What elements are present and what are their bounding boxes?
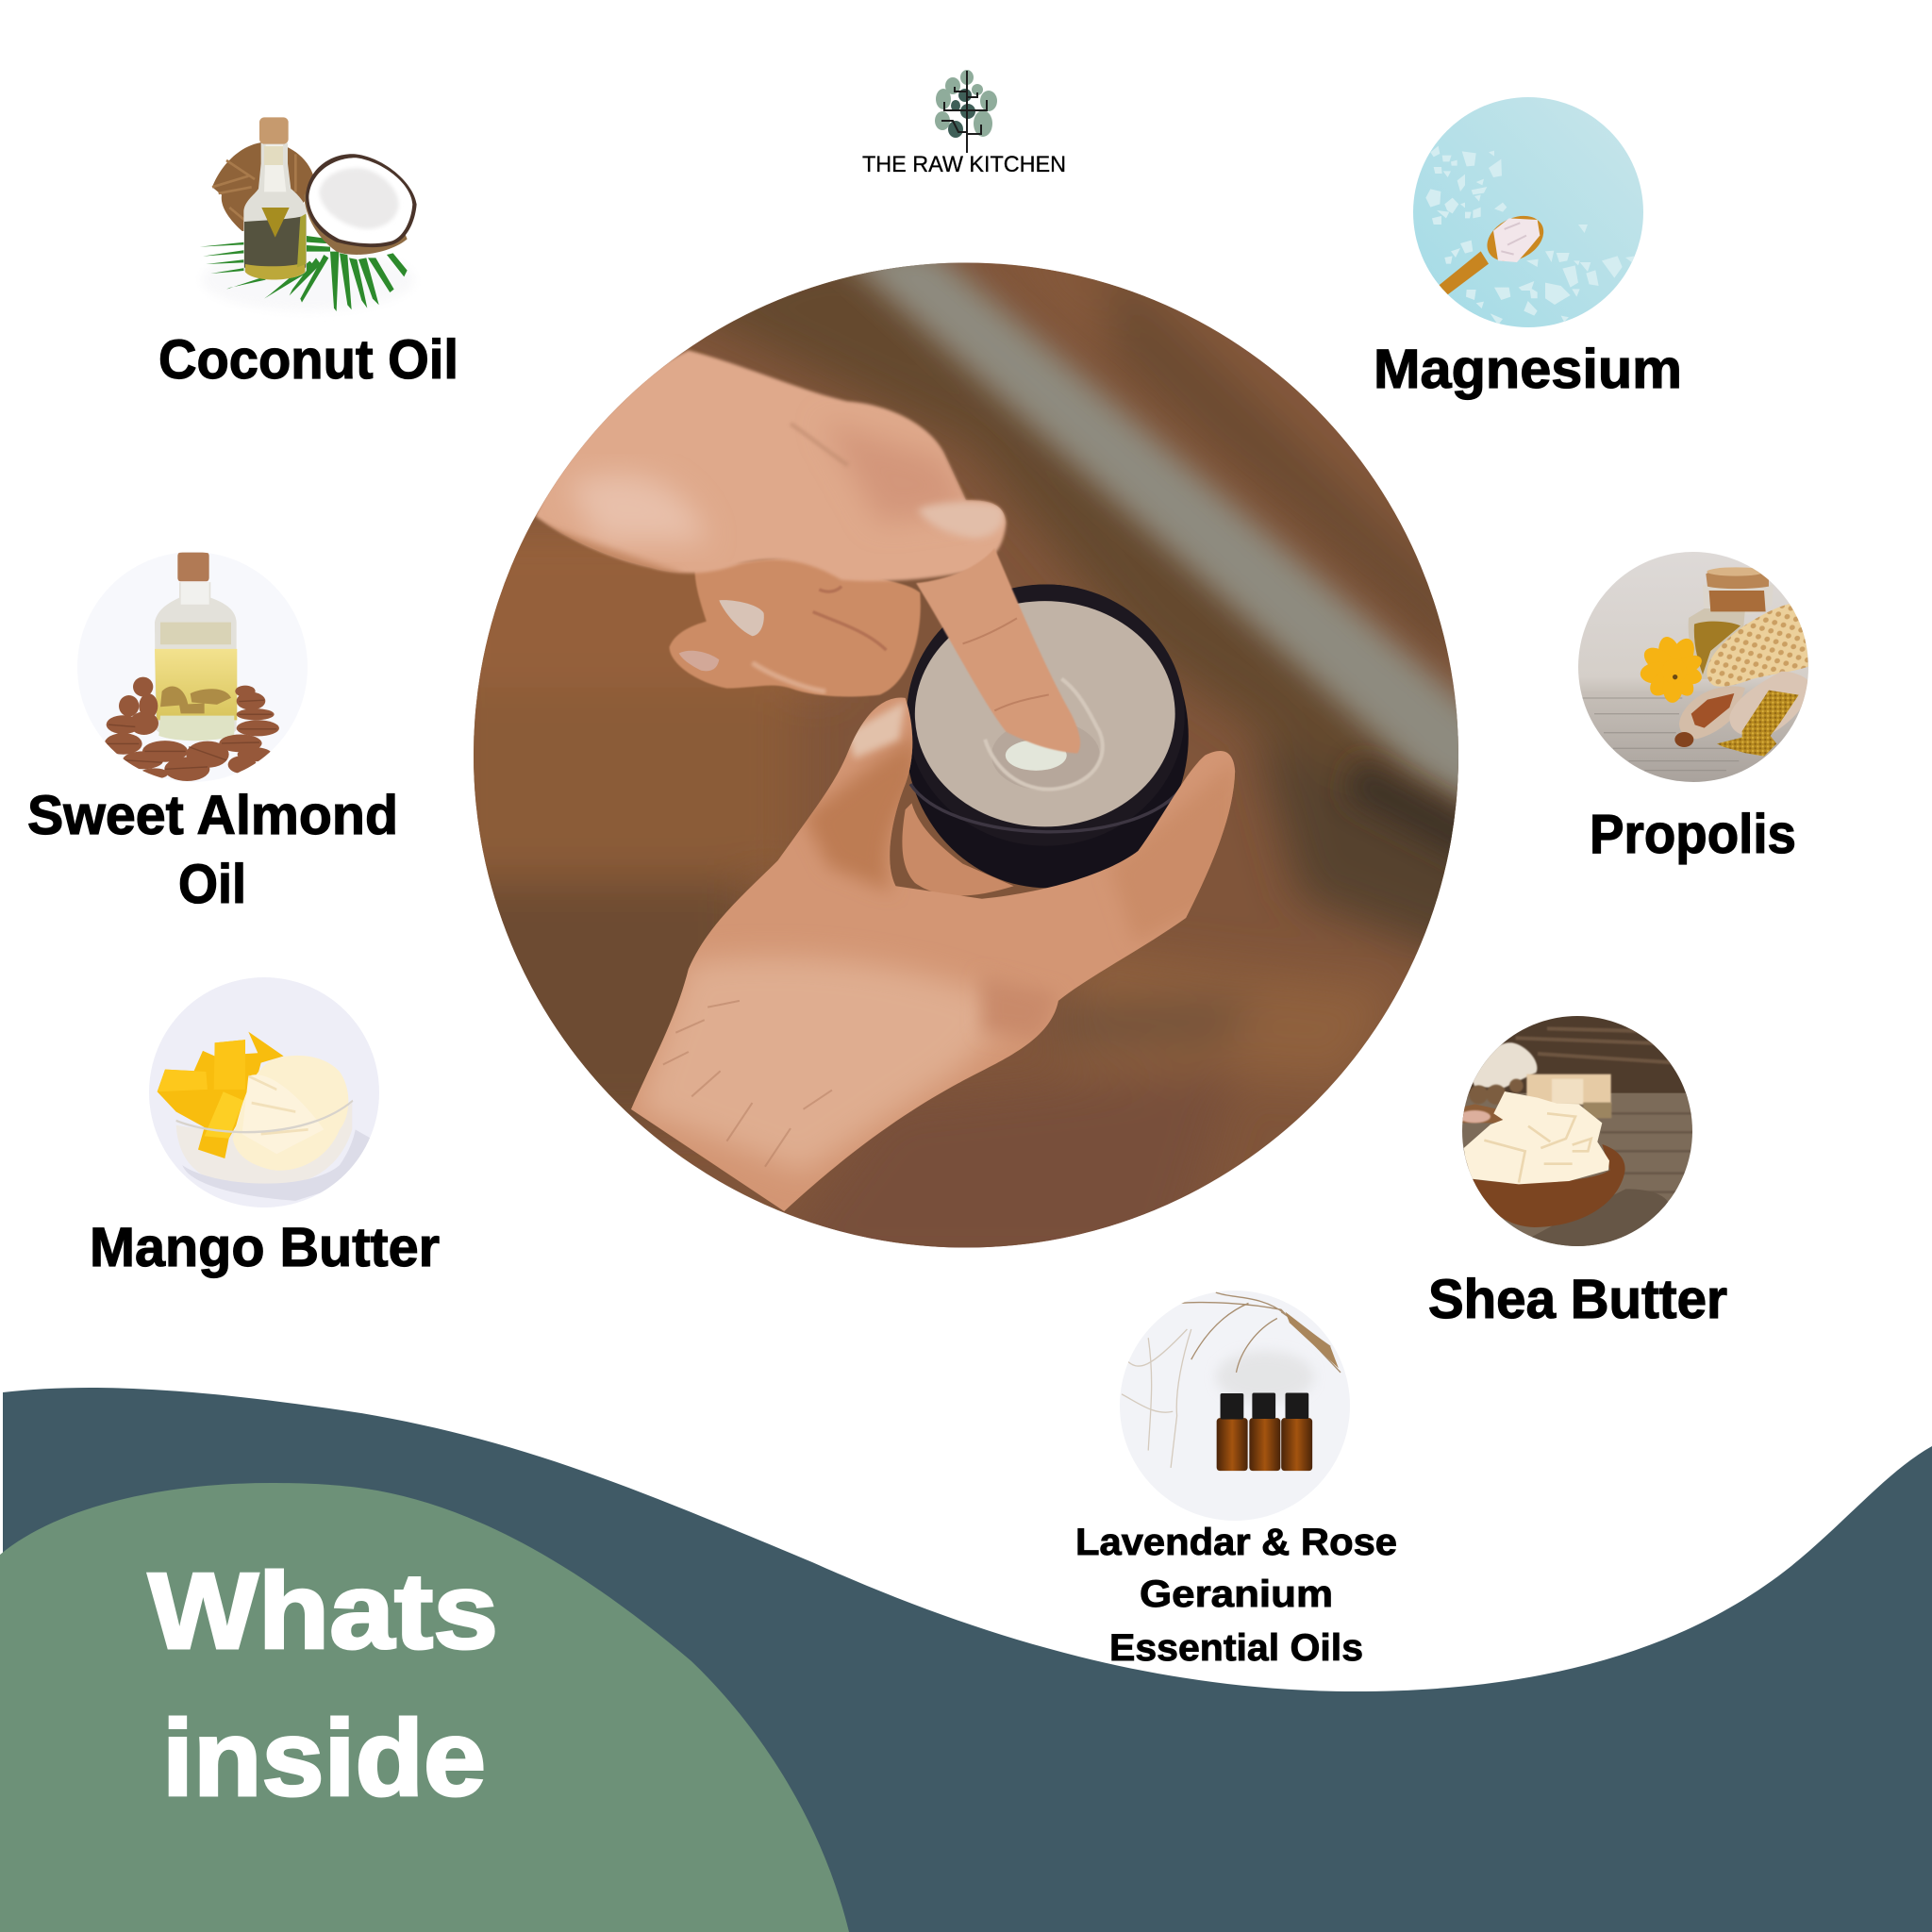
shea butter image	[1459, 1016, 1693, 1247]
magnesium image	[1413, 97, 1644, 328]
label: Coconut Oil	[158, 329, 458, 391]
label	[1075, 1522, 1397, 1669]
honeycomb	[1707, 604, 1808, 687]
ingredient: lavender and rose geranium essential oils	[1075, 1288, 1397, 1669]
finger behind jar	[902, 803, 1014, 896]
wooden bowl	[1472, 1144, 1625, 1227]
whole coconut	[212, 142, 313, 231]
soap bars	[1526, 1074, 1611, 1104]
logo wordmark: THE RAW KITCHEN	[862, 152, 1066, 177]
label: Lavendar & Rose	[1075, 1522, 1397, 1563]
heading: Whats inside	[148, 1552, 498, 1819]
nuts	[1469, 1079, 1524, 1105]
soap ball	[1472, 1042, 1537, 1089]
amber bottles	[1217, 1392, 1312, 1471]
bottle	[243, 117, 307, 279]
label: Geranium	[1140, 1574, 1333, 1615]
label: Oil	[178, 854, 246, 915]
ingredient: propolis	[1575, 547, 1811, 865]
cream jar	[906, 584, 1189, 888]
lower hand	[631, 698, 1235, 1211]
mango cubes	[158, 1032, 284, 1158]
ingredient: coconut oil	[158, 117, 458, 391]
mango butter image	[146, 974, 382, 1210]
almonds	[105, 677, 279, 781]
icon: tree	[935, 70, 997, 153]
propolis image	[1575, 547, 1811, 783]
glass bowl	[176, 1103, 352, 1188]
curled fingers	[670, 558, 921, 696]
coconut oil image	[200, 117, 417, 311]
label: Shea Butter	[1428, 1269, 1727, 1330]
coconut half	[304, 186, 408, 255]
label: Essential Oils	[1109, 1627, 1363, 1669]
photo contents	[474, 262, 1458, 1247]
ingredient: sweet almond oil	[27, 550, 398, 915]
bottom wave: dark teal	[3, 1388, 1932, 1932]
heading: Whats inside: Whats	[148, 1552, 498, 1672]
ingredient: mango butter	[90, 974, 440, 1278]
lower hand shading	[638, 701, 1237, 1173]
label: Magnesium	[1374, 339, 1682, 400]
palm fronds	[200, 236, 408, 311]
upper hand	[536, 350, 1006, 581]
label: Mango Butter	[90, 1217, 440, 1278]
essential oils image	[1118, 1288, 1354, 1524]
heading: Whats inside: inside	[162, 1699, 486, 1819]
upper hand shading	[555, 423, 1006, 572]
butter chunks	[1464, 1091, 1609, 1184]
dried twigs	[1179, 1292, 1341, 1373]
label: Propolis	[1590, 804, 1796, 865]
ingredient: shea butter	[1428, 1016, 1727, 1330]
ingredient: magnesium	[1374, 97, 1682, 400]
pointing finger	[916, 548, 1080, 754]
almond oil image	[105, 553, 279, 781]
bottle	[155, 582, 237, 738]
wooden spoon	[1439, 251, 1489, 294]
butter scoop	[233, 1056, 348, 1171]
label: Sweet Almond	[27, 785, 398, 846]
small bowl with pink salt	[1462, 1104, 1503, 1123]
wooden scoops	[1679, 687, 1745, 739]
label	[27, 785, 398, 915]
bottom-left blob: green	[0, 1483, 849, 1932]
logo: The Raw Kitchen	[862, 70, 1066, 177]
photo: hands dipping into cream jar	[474, 262, 1458, 1247]
salt flakes	[1425, 146, 1635, 325]
jar and corks	[1703, 585, 1774, 615]
calendula flower	[1640, 637, 1702, 703]
blurred grey band	[843, 262, 1458, 808]
